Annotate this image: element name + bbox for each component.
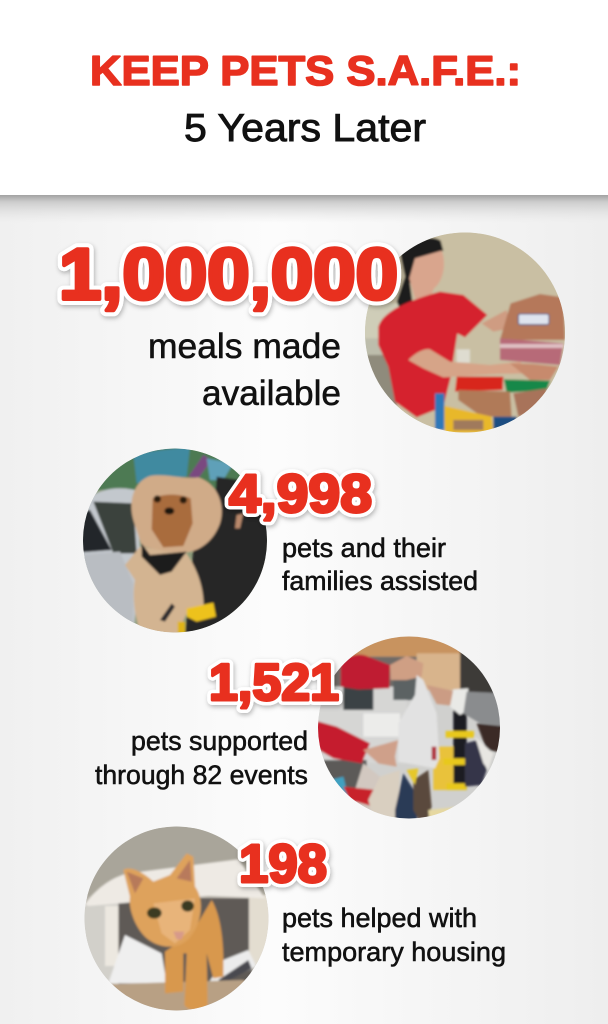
photo: hands passing pet food bag <box>318 636 500 818</box>
stat: 1,000,000: 1,000,000 <box>59 235 398 315</box>
stat: 1,521: 1,521 <box>209 654 339 712</box>
stat: 4,998: 4,998 <box>229 464 372 524</box>
caption: pets supported through 82 events <box>95 726 308 790</box>
caption: pets and their families assisted <box>282 533 478 596</box>
photo: volunteer holding pet food bag <box>365 232 565 432</box>
caption: pets helped with temporary housing <box>282 903 506 967</box>
caption: pets and their families assisted: families assisted <box>282 566 478 596</box>
caption: pets supported through 82 events: pets supported <box>131 726 308 756</box>
stat: 198: 198 <box>239 834 327 894</box>
subtitle: 5 Years Later <box>184 107 426 150</box>
stat: 1,000,000: 1,000,000 <box>59 235 398 315</box>
photo: small dog held by owner <box>83 448 267 632</box>
header band <box>0 0 608 195</box>
caption: pets helped with temporary housing: pets helped with <box>282 903 477 933</box>
caption: pets supported through 82 events: through 82 events <box>95 760 308 790</box>
caption: meals made available: available <box>202 374 341 413</box>
title: KEEP PETS S.A.F.E.: <box>90 47 521 94</box>
stat: 198: 198 <box>239 834 327 894</box>
caption: pets and their families assisted: pets and their <box>282 533 446 563</box>
stat: 1,521: 1,521 <box>209 654 339 712</box>
caption: meals made available: meals made <box>148 327 341 366</box>
caption: pets helped with temporary housing: temporary housing <box>282 937 506 967</box>
stat: 4,998: 4,998 <box>229 464 372 524</box>
photo: orange cat under bench <box>84 826 268 1010</box>
caption: meals made available <box>148 327 341 413</box>
